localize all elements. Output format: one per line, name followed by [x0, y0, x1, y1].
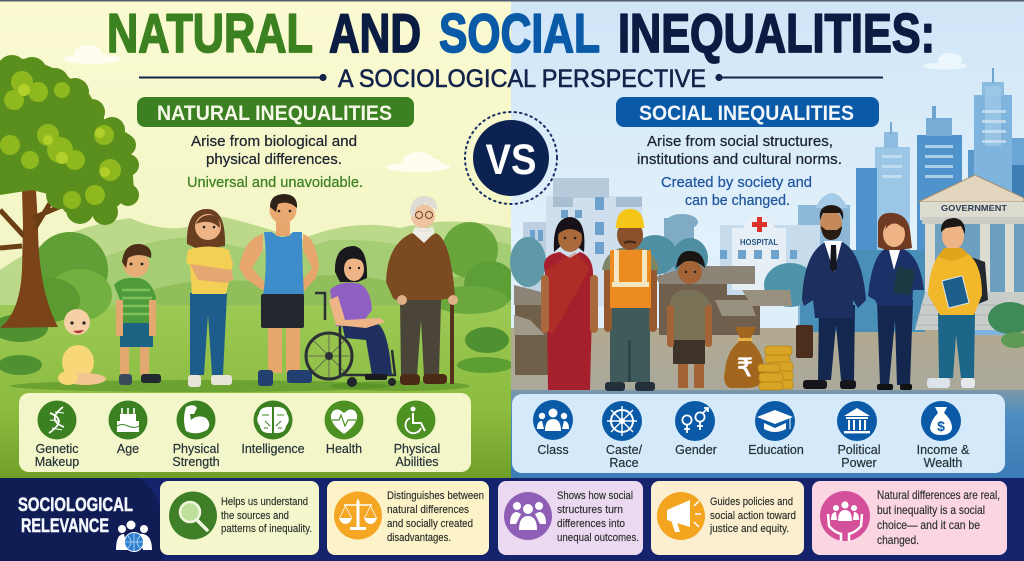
card: social structures	[498, 481, 643, 555]
subtitle	[139, 65, 883, 93]
text: distinguishes: natural differences	[387, 504, 469, 516]
clouds	[63, 45, 967, 172]
card: distinguishes	[327, 481, 489, 555]
text: social structures	[557, 490, 639, 544]
icon: income and wealth	[921, 401, 961, 441]
subtitle: A SOCIOLOGICAL PERSPECTIVE	[338, 65, 706, 93]
text: understand: patterns of inequality.	[221, 523, 312, 535]
figure: poor child	[667, 251, 712, 388]
band: sociological relevance: RELEVANCE	[21, 516, 109, 537]
label: genetic makeup: Genetic	[35, 442, 79, 456]
label: caste and race: Caste/	[606, 443, 643, 457]
card: guides policies	[651, 481, 804, 555]
label: physical abilities: Physical	[394, 442, 440, 456]
figure: old man with cane	[386, 196, 458, 385]
text: natural description: physical differences.	[206, 151, 342, 168]
label: physical strength: Strength	[172, 455, 220, 469]
label: political power: Political	[837, 443, 881, 457]
panel: natural background	[0, 0, 516, 480]
figure: woman in wheelchair	[306, 246, 396, 387]
icon: magnifier	[169, 492, 217, 540]
text: social structures: unequal outcomes.	[557, 532, 639, 544]
text: natural description: Universal and unavoidable.	[187, 174, 363, 191]
title	[107, 2, 935, 64]
label: physical abilities: Abilities	[395, 455, 439, 469]
text: distinguishes: disadvantages.	[387, 532, 451, 544]
text: social description: institutions and cultural norms.	[637, 151, 842, 168]
text: conclusion	[877, 488, 1000, 547]
figure: businesswoman	[868, 213, 924, 390]
icon: genetic makeup	[38, 400, 76, 440]
icon: political power	[837, 401, 877, 441]
text: guides policies: Guides policies and	[710, 496, 793, 508]
label: political power: Power	[841, 456, 877, 470]
icon: age	[108, 400, 148, 440]
icon: gender	[675, 401, 715, 441]
label: income and wealth: Income &	[917, 443, 970, 457]
icon: hands holding people	[820, 491, 870, 541]
title: SOCIAL	[439, 2, 600, 64]
label: gender: Gender	[675, 443, 717, 457]
figure: student	[927, 218, 988, 388]
band: sociological relevance: SOCIOLOGICAL	[18, 495, 133, 516]
icon: scales	[334, 492, 382, 540]
illustration: hospital: HOSPITAL	[740, 237, 778, 247]
icon: class	[533, 400, 573, 440]
figure: girl	[186, 209, 233, 387]
icon: megaphone	[657, 492, 705, 540]
card: understand	[160, 481, 319, 555]
text: social description: Created by society and	[661, 174, 812, 191]
text: social structures: structures turn	[557, 504, 623, 516]
panel: social background	[511, 0, 1024, 480]
icon: people with globe	[116, 520, 152, 552]
text: conclusion: choice— and it can be	[877, 518, 980, 532]
illustration: slum huts	[514, 266, 792, 375]
heading: social inequalities: SOCIAL INEQUALITIES	[639, 102, 854, 125]
figure: construction worker	[602, 209, 659, 391]
label: genetic makeup: Makeup	[35, 455, 79, 469]
label: physical strength: Physical	[173, 442, 219, 456]
icon: health	[324, 400, 364, 440]
text: understand: Helps us understand	[221, 496, 308, 508]
label: intelligence: Intelligence	[241, 442, 305, 456]
text: understand: the sources and	[221, 510, 289, 522]
icon: group	[504, 492, 552, 540]
figure: athletic man	[239, 194, 319, 386]
text: natural description	[187, 133, 363, 191]
text: distinguishes	[387, 490, 484, 544]
label: age: Age	[117, 442, 139, 456]
label: income and wealth: Wealth	[924, 456, 962, 470]
text: social description	[637, 133, 842, 209]
illustration: government building	[915, 175, 1024, 348]
text: distinguishes: Distinguishes between	[387, 490, 484, 502]
VS badge: VS	[486, 136, 536, 184]
text: distinguishes: and socially created	[387, 518, 473, 530]
illustration: skyline	[798, 68, 1024, 335]
text: social structures: Shows how social	[557, 490, 633, 502]
heading: natural inequalities	[137, 97, 414, 127]
text: conclusion: Natural differences are real,	[877, 488, 1000, 502]
figure: woman in red sari	[541, 217, 598, 390]
text: guides policies: social action toward	[710, 510, 796, 522]
band: sociological relevance	[0, 478, 1024, 561]
text: social description: can be changed.	[685, 192, 790, 209]
figure: businessman	[796, 205, 866, 389]
illustration: hospital	[720, 214, 816, 307]
text: understand	[221, 496, 312, 535]
icon: physical abilities	[396, 400, 436, 440]
icon: intelligence	[254, 400, 292, 440]
label: health: Health	[326, 442, 362, 456]
text: social structures: differences into	[557, 518, 625, 530]
text: social description: Arise from social structures,	[647, 133, 833, 150]
title: AND	[329, 2, 421, 64]
heading: natural inequalities: NATURAL INEQUALITIES	[157, 102, 392, 125]
label: education: Education	[748, 443, 804, 457]
text: guides policies: justice and equity.	[709, 523, 789, 535]
title: INEQUALITIES:	[618, 2, 935, 64]
text: natural description: Arise from biological and	[191, 133, 357, 150]
title: NATURAL	[107, 2, 313, 64]
card: conclusion	[812, 481, 1007, 555]
figure: money bag and coins	[724, 327, 793, 390]
illustration: government building: GOVERNMENT	[941, 203, 1008, 213]
VS badge	[465, 112, 557, 204]
figure: money bag and coins: ₹	[737, 354, 753, 382]
illustration: apartment blocks	[510, 178, 820, 322]
label: caste and race: Race	[609, 456, 639, 470]
panel: natural factors	[19, 393, 471, 472]
text: conclusion: but inequality is a social	[877, 503, 985, 517]
text: guides policies	[709, 496, 796, 535]
panel: social factors	[512, 394, 1005, 473]
illustration: tree	[0, 55, 139, 328]
heading: social inequalities	[616, 97, 879, 127]
icon: education	[755, 401, 795, 441]
label: class: Class	[537, 443, 569, 457]
figure: baby	[58, 309, 106, 385]
icon: income and wealth: $	[937, 418, 945, 434]
icon: caste and race	[602, 401, 642, 441]
top border	[0, 0, 1024, 2]
icon: physical strength	[176, 400, 216, 440]
figure: boy	[114, 244, 161, 385]
text: conclusion: changed.	[877, 533, 919, 547]
